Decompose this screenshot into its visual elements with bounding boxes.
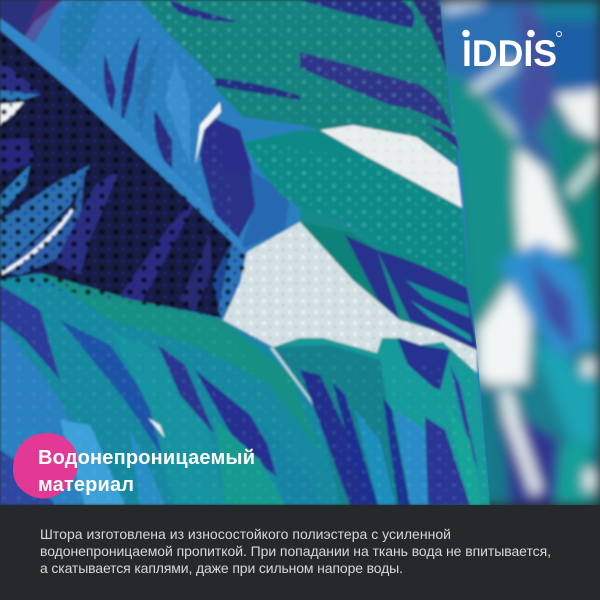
heading: Водонепроницаемый bbox=[38, 447, 255, 469]
lower right leaf bbox=[273, 338, 490, 505]
water drops texture bbox=[140, 0, 460, 167]
upper teal leaf bbox=[140, 0, 460, 167]
upper blue leaf stripes bbox=[0, 0, 290, 250]
description panel bbox=[0, 505, 600, 600]
lower left leaf bbox=[0, 273, 340, 505]
midrib bbox=[0, 18, 248, 258]
middle teal leaf bbox=[243, 130, 470, 290]
description text: а скатывается каплями, даже при сильном напоре воды. bbox=[40, 560, 403, 576]
front curtain leaves bbox=[0, 0, 490, 505]
thin white tail bbox=[270, 347, 317, 408]
description text: Штора изготовлена из износостойкого полиэстера с усиленной bbox=[40, 526, 451, 542]
description text: водонепроницаемой пропиткой. При попадании на ткань вода не впитывается, bbox=[40, 543, 551, 559]
description text bbox=[40, 526, 551, 576]
white centre bbox=[223, 222, 477, 373]
blurred back curtain bbox=[430, 0, 600, 505]
white upper bbox=[320, 125, 462, 208]
logo: IDDIS: IDDIS bbox=[462, 33, 557, 74]
white patch bbox=[0, 102, 24, 125]
heading: материал bbox=[38, 474, 134, 496]
white sliver bbox=[195, 102, 221, 165]
navy leaf and teal lobe bbox=[377, 250, 477, 350]
dark navy leaf bbox=[0, 32, 248, 318]
white crescent bbox=[2, 206, 75, 275]
